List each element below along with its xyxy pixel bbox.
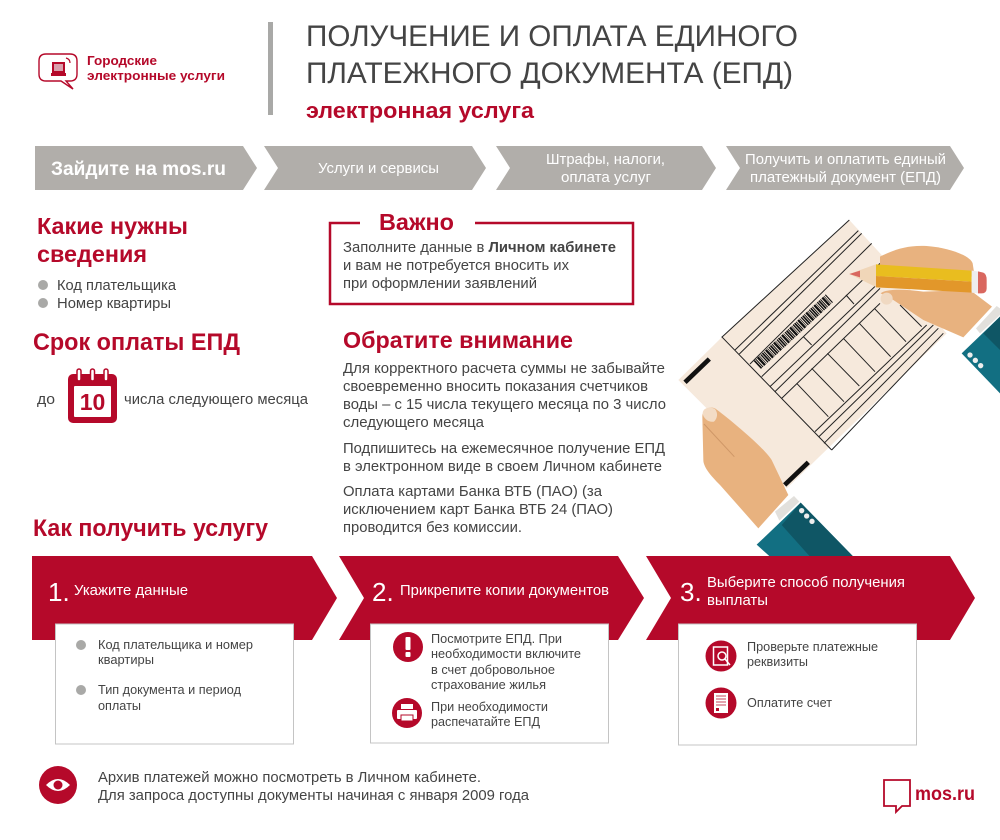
illustration: hands with document and pencil (678, 220, 1000, 557)
card: step 1: квартиры (98, 653, 154, 667)
panel: important: Заполните данные в Личном кабинете (343, 240, 616, 256)
panel: important: Важно (379, 209, 454, 235)
heading: how to get the service: Как получить услугу (33, 515, 269, 542)
panel: pay attention (343, 327, 666, 536)
icon: exclamation (393, 632, 423, 662)
icon: eye (39, 766, 77, 804)
steps: red arrow band: 2. (372, 577, 394, 607)
panel: pay attention: воды – с 15 числа текущего месяца по 3 число (343, 397, 666, 413)
panel: pay attention: исключением карт Банка ВТБ 24 (ПАО) (343, 502, 613, 518)
panel: pay attention: Обратите внимание (343, 327, 573, 353)
card: step 1: оплаты (98, 699, 141, 713)
breadcrumb arrows: Зайдите на mos.ru (51, 159, 226, 180)
panel: pay attention: Для корректного расчета суммы не забывайте (343, 361, 665, 377)
breadcrumb arrows: Получить и оплатить единый (745, 152, 946, 168)
card: step 1 (56, 624, 294, 744)
panel: required information: сведения (37, 241, 147, 267)
logo: mos.ru (884, 780, 975, 812)
card: step 1: Код плательщика и номер (98, 638, 253, 652)
panel: required information: Номер квартиры (57, 296, 171, 312)
title: ПЛАТЕЖНОГО ДОКУМЕНТА (ЕПД) (306, 57, 793, 90)
panel: pay attention: Оплата картами Банка ВТБ (ПАО) (за (343, 484, 603, 500)
footer note with eye icon: Для запроса доступны документы начиная с января 2009 года (98, 787, 530, 804)
logo: city electronic services: электронные услуги (87, 68, 225, 83)
logo: mos.ru: mos.ru (915, 784, 975, 805)
footer note with eye icon (39, 766, 530, 804)
card: step 2: в счет добровольное (431, 663, 555, 677)
card: step 3 (678, 624, 916, 745)
steps: red arrow band: Укажите данные (74, 583, 188, 599)
breadcrumb arrows (35, 146, 964, 190)
logo: city electronic services: Городские (87, 53, 157, 68)
breadcrumb arrows: Штрафы, налоги, (546, 152, 665, 168)
panel: payment deadline: Срок оплаты ЕПД (33, 329, 240, 356)
steps: red arrow band: 1. (48, 577, 70, 607)
icon: printer (392, 698, 422, 728)
panel: pay attention: в электронном виде в своем Личном кабинете (343, 459, 662, 475)
steps: red arrow band: Прикрепите копии документов (400, 583, 609, 599)
logo: city electronic services (39, 53, 225, 89)
card: step 2: необходимости включите (431, 647, 581, 661)
card: step 3: Оплатите счет (747, 696, 832, 710)
card: step 2: При необходимости (431, 700, 548, 714)
steps: red arrow band: 3. (680, 577, 702, 607)
panel: pay attention: проводится без комиссии. (343, 520, 522, 536)
steps: red arrow band: выплаты (707, 593, 768, 609)
steps: red arrow band: Выберите способ получения (707, 575, 905, 591)
icon: document with magnifier (706, 640, 736, 672)
panel: payment deadline (33, 329, 309, 423)
panel: payment deadline: числа следующего месяца (124, 392, 309, 408)
card: step 3: Проверьте платежные (747, 640, 878, 654)
card: step 2: страхование жилья (431, 678, 546, 692)
panel: payment deadline: до (37, 392, 55, 408)
panel: pay attention: Подпишитесь на ежемесячное получение ЕПД (343, 441, 665, 457)
panel: important (330, 209, 633, 304)
breadcrumb arrows: платежный документ (ЕПД) (750, 170, 941, 186)
panel: pay attention: следующего месяца (343, 415, 485, 431)
panel: important: при оформлении заявлений (343, 276, 537, 292)
icon: calendar: 10 (80, 389, 105, 415)
card: step 2: распечатайте ЕПД (431, 715, 541, 729)
breadcrumb arrows: Услуги и сервисы (318, 161, 439, 177)
breadcrumb arrows: оплата услуг (561, 170, 651, 186)
footer note with eye icon: Архив платежей можно посмотреть в Личном кабинете. (98, 769, 481, 786)
card: step 2 (370, 624, 608, 743)
document (678, 220, 947, 488)
panel: required information: Код плательщика (57, 278, 177, 294)
panel: required information (37, 213, 188, 312)
panel: required information: Какие нужны (37, 213, 188, 239)
card: step 3: реквизиты (747, 655, 808, 669)
icon: calendar (68, 369, 117, 423)
title (306, 20, 798, 123)
title: ПОЛУЧЕНИЕ И ОПЛАТА ЕДИНОГО (306, 20, 798, 53)
steps: red arrow band (32, 556, 975, 640)
card: step 1: Тип документа и период (98, 683, 242, 697)
title: электронная услуга (306, 98, 535, 123)
right hand with pencil (849, 246, 1000, 393)
card: step 2: Посмотрите ЕПД. При (431, 632, 562, 646)
panel: pay attention: своевременно вносить показания счетчиков (343, 379, 648, 395)
left hand (702, 408, 853, 557)
panel: important: и вам не потребуется вносить их (343, 258, 570, 274)
icon: invoice (706, 688, 736, 718)
